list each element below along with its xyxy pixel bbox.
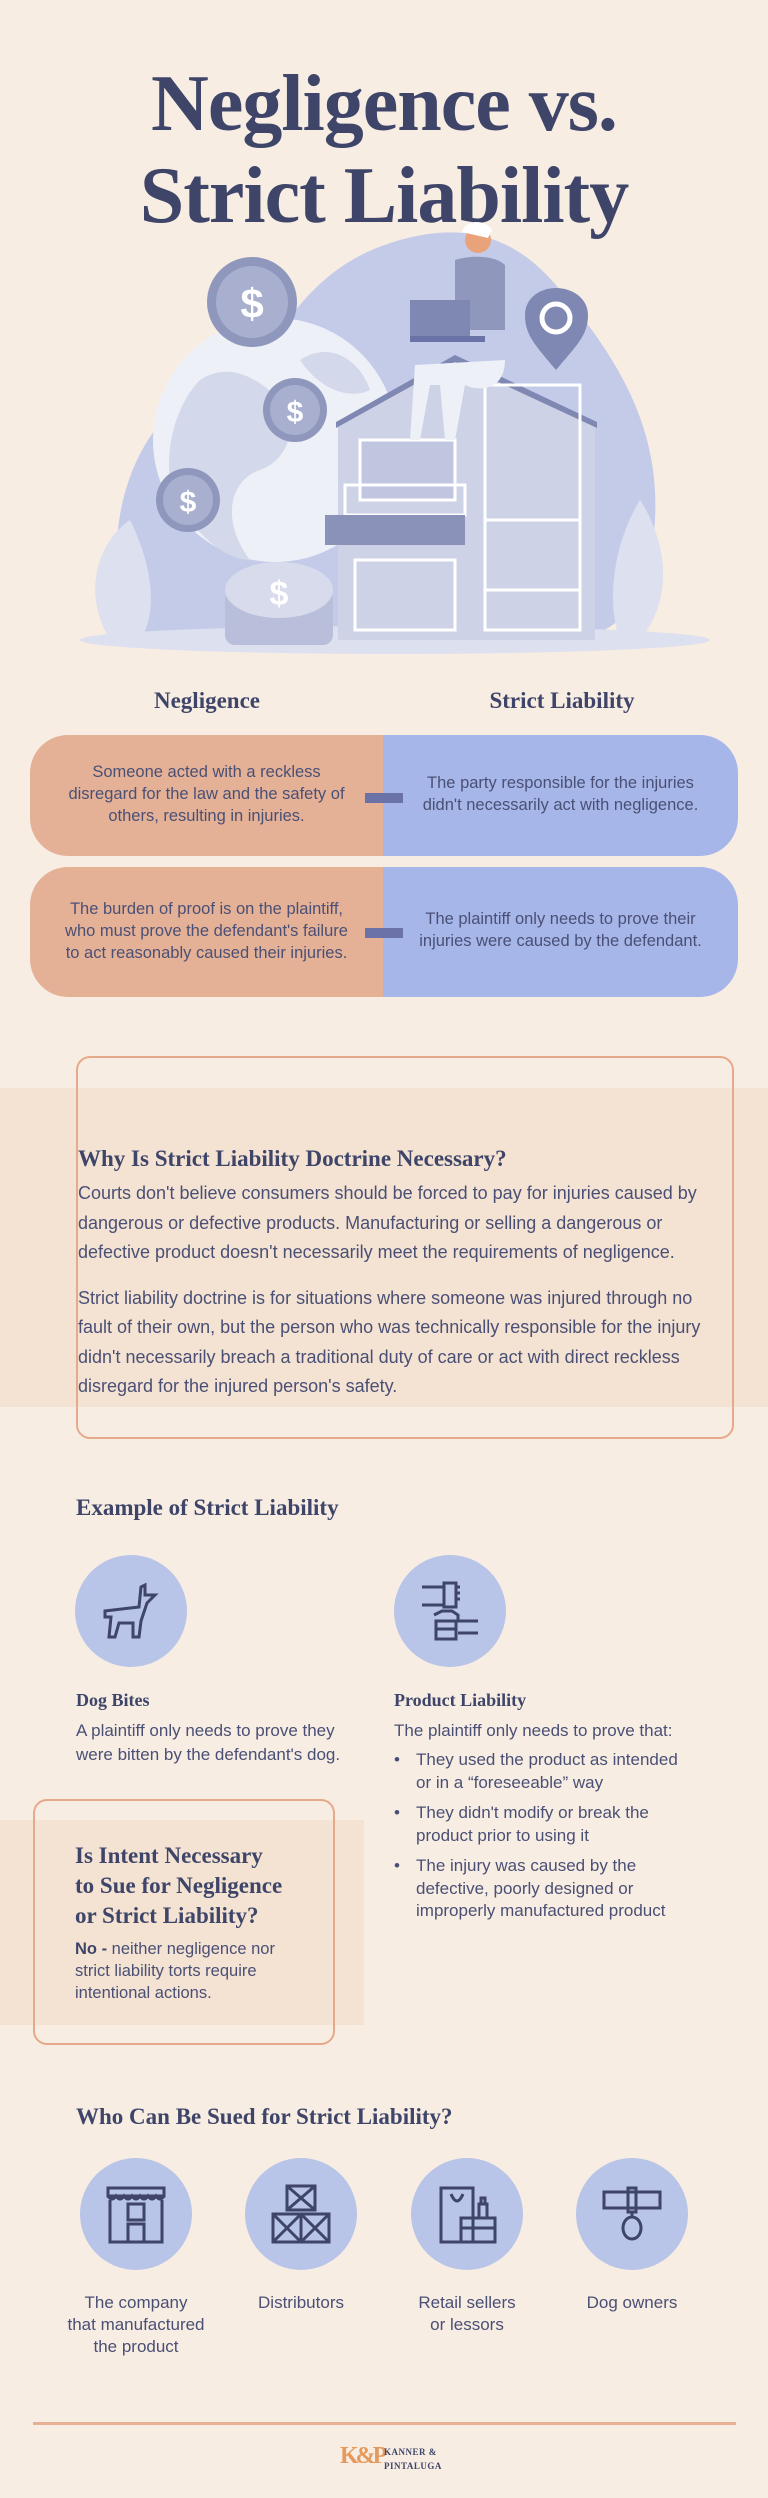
comparison row 2 <box>30 867 738 997</box>
globe <box>153 318 397 562</box>
row 2 strict liability cell <box>383 867 738 997</box>
icon: crates <box>245 2158 357 2270</box>
divider line <box>33 2422 736 2425</box>
logo: KANNER & <box>384 2447 437 2457</box>
text: why body: defective product doesn't necessarily meet the requirements of negligence. Strict liability doctrine is for situations where someone was injured through no <box>78 1242 692 1308</box>
label: or lessors <box>430 2315 504 2334</box>
title <box>140 60 628 240</box>
illustration: house, globe, coins: $ <box>270 575 289 613</box>
block: product liability: • <box>394 1803 400 1822</box>
logo <box>340 2443 442 2471</box>
text: intent answer: No - neither negligence nor <box>75 1940 275 1958</box>
house <box>338 360 595 640</box>
item: distributors <box>245 2158 357 2312</box>
row 1 negligence cell <box>30 735 383 856</box>
leaves <box>95 520 151 640</box>
icon: dog <box>75 1555 187 1667</box>
text: why body <box>78 1183 700 1396</box>
row 2 negligence cell: The burden of proof is on the plaintiff, <box>70 900 343 918</box>
text: why body: dangerous or defective products. Manufacturing or selling a dangerous or <box>78 1212 662 1232</box>
block: product liability: Product Liability <box>394 1690 526 1710</box>
block: product liability: The plaintiff only needs to prove that: <box>394 1721 672 1740</box>
illustration: house, globe, coins: $ <box>240 280 264 327</box>
label: Dog owners <box>587 2293 677 2312</box>
block: product liability: improperly manufactured product <box>416 1901 665 1920</box>
label: the product <box>93 2337 179 2356</box>
block: product liability: product prior to using it <box>416 1826 589 1844</box>
row 2 negligence cell: to act reasonably caused their injuries. <box>66 944 347 962</box>
text: why body: didn't necessarily breach a traditional duty of care or act with direct reckless <box>78 1346 680 1366</box>
icon: product <box>394 1555 506 1667</box>
text: intent answer <box>75 1940 275 2002</box>
illustration: house, globe, coins <box>80 222 710 654</box>
coins <box>207 257 297 347</box>
person <box>465 227 491 253</box>
block: product liability: They didn't modify or break the <box>416 1803 649 1822</box>
row 1 negligence cell: Someone acted with a reckless <box>92 763 321 781</box>
item: retail sellers <box>411 2158 523 2334</box>
block: product liability: defective, poorly designed or <box>416 1878 633 1898</box>
row 1 strict liability cell: didn't necessarily act with negligence. <box>423 796 698 814</box>
block: product liability: They used the product as intended <box>416 1750 678 1769</box>
text: intent answer: strict liability torts require <box>75 1962 257 1980</box>
heading: why: Why Is Strict Liability Doctrine Necessary? <box>78 1146 507 1171</box>
block: dog bites: Dog Bites <box>76 1690 150 1710</box>
row 1 strict liability cell <box>383 735 738 856</box>
heading: intent <box>75 1843 282 1928</box>
text: why body: fault of their own, but the person who was technically responsible for the injury <box>78 1317 700 1337</box>
logo: PINTALUGA <box>384 2461 442 2471</box>
block: product liability <box>394 1690 678 1920</box>
heading: intent: to Sue for Negligence <box>75 1873 282 1898</box>
text: intent answer: intentional actions. <box>75 1984 212 2002</box>
block: product liability: • <box>394 1750 400 1769</box>
comparison row 1 <box>30 735 738 856</box>
heading: who can be sued: Who Can Be Sued for Strict Liability? <box>76 2104 453 2129</box>
connector <box>365 928 403 938</box>
illustration: house, globe, coins: $ <box>287 396 304 429</box>
text: why body: disregard for the injured person's safety. <box>78 1376 397 1396</box>
illustration: house, globe, coins: $ <box>180 486 197 519</box>
title: Strict Liability <box>140 152 628 240</box>
item: dog owners <box>576 2158 688 2312</box>
icon: storefront <box>80 2158 192 2270</box>
row 1 negligence cell: disregard for the law and the safety of <box>68 785 345 803</box>
column heading: Negligence: Negligence <box>154 688 260 713</box>
block: dog bites <box>76 1690 340 1764</box>
block: product liability: The injury was caused by the <box>416 1856 636 1875</box>
label: Distributors <box>258 2293 344 2312</box>
connector <box>365 793 403 803</box>
band: why section background <box>0 1088 768 1407</box>
row 2 strict liability cell: injuries were caused by the defendant. <box>419 932 702 950</box>
row 2 strict liability cell: The plaintiff only needs to prove their <box>425 910 696 928</box>
band: intent background <box>0 1820 364 2025</box>
label: that manufactured <box>67 2315 205 2334</box>
block: product liability: • <box>394 1856 400 1875</box>
label <box>67 2293 205 2356</box>
panel: intent <box>33 1799 335 2045</box>
title: Negligence vs. <box>151 60 617 148</box>
icon: collar <box>576 2158 688 2270</box>
panel: why strict liability <box>76 1056 734 1439</box>
block: dog bites: were bitten by the defendant's dog. <box>76 1745 340 1764</box>
label: Retail sellers <box>418 2293 516 2312</box>
row 2 negligence cell: who must prove the defendant's failure <box>65 922 348 940</box>
heading: example: Example of Strict Liability <box>76 1495 339 1520</box>
blob <box>117 232 655 640</box>
item: manufacturer <box>67 2158 205 2356</box>
icon: shopping bag <box>411 2158 523 2270</box>
label: The company <box>84 2293 188 2312</box>
logo: K&P <box>340 2443 384 2469</box>
heading: intent: Is Intent Necessary <box>75 1843 263 1868</box>
block: dog bites: A plaintiff only needs to prove they <box>76 1721 335 1740</box>
column heading: Strict Liability: Strict Liability <box>489 688 635 713</box>
row 2 negligence cell <box>30 867 383 997</box>
heading: intent: or Strict Liability? <box>75 1903 259 1928</box>
pin <box>525 288 588 370</box>
block: product liability: or in a “foreseeable” way <box>416 1772 603 1792</box>
text: why body: Courts don't believe consumers should be forced to pay for injuries caused by <box>78 1183 697 1203</box>
row 1 negligence cell: others, resulting in injuries. <box>108 807 305 825</box>
label <box>418 2293 516 2334</box>
row 1 strict liability cell: The party responsible for the injuries <box>427 774 694 792</box>
